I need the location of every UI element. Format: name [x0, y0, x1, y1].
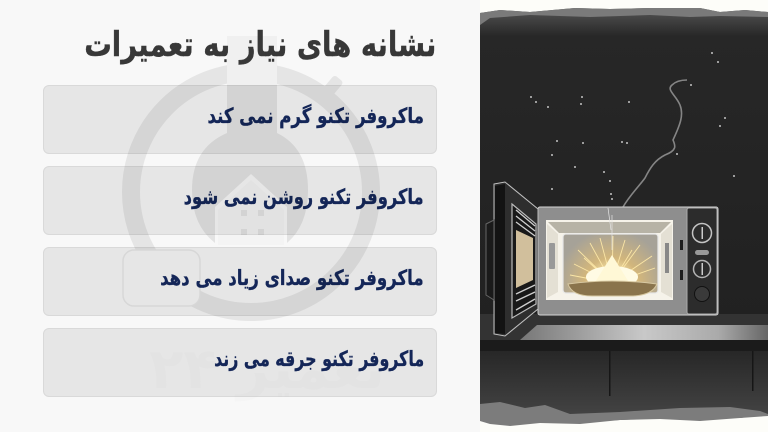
open door [486, 182, 538, 336]
card: not heating [43, 85, 437, 154]
dark wall [480, 8, 768, 320]
counter [480, 314, 768, 351]
card: loud noise: ماکروفر تکنو صدای زیاد می دهد [160, 266, 424, 290]
watermark logo: تعمیر ۲۴ [149, 337, 385, 402]
illustration: sparking microwave [480, 8, 768, 426]
panel: text column [0, 0, 480, 432]
cabinets [480, 351, 768, 426]
sparks burst [570, 208, 655, 288]
smoke wisp [623, 80, 687, 207]
title: نشانه های نیاز به تعمیرات [84, 25, 436, 65]
sparks on wall [530, 52, 735, 200]
card: not turning on [43, 166, 437, 235]
watermark logo [122, 65, 385, 402]
cavity [546, 220, 683, 300]
card: sparking: ماکروفر تکنو جرقه می زند [214, 347, 424, 371]
card: not turning on: ماکروفر تکنو روشن نمی شود [184, 185, 424, 209]
card: sparking [43, 328, 437, 397]
control panel [687, 208, 717, 314]
plate [568, 281, 657, 296]
microwave body [538, 207, 718, 315]
paper background [480, 0, 768, 432]
card: not heating: ماکروفر تکنو گرم نمی کند [208, 104, 424, 128]
torn grey edge: top [480, 8, 768, 25]
card: loud noise [43, 247, 437, 316]
